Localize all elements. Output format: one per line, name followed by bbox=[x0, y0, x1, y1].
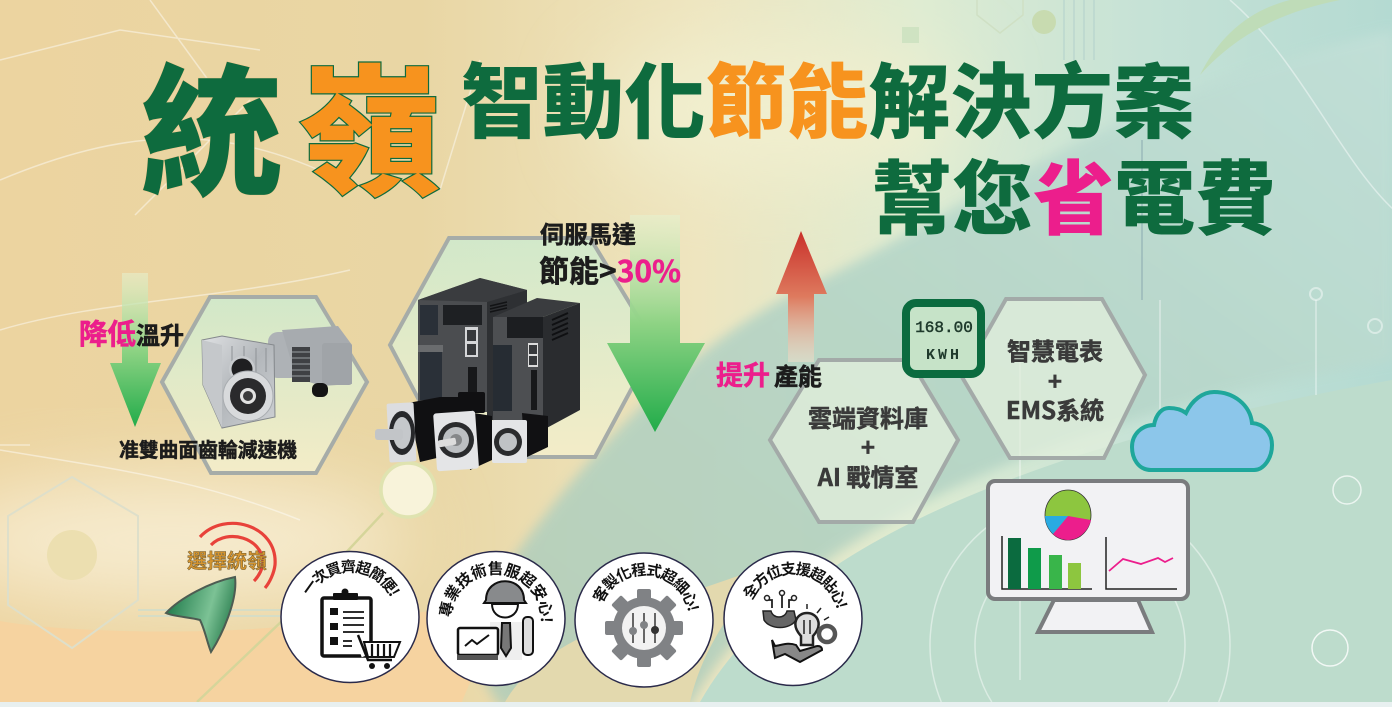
label: choose Tongling: 選擇統嶺 bbox=[187, 545, 267, 574]
label: lower temperature: 降低溫升 bbox=[79, 312, 184, 353]
badge: one-stop purchase: 一次買齊超簡便! bbox=[304, 559, 400, 596]
title: line 2: 幫您省電費 bbox=[871, 135, 1276, 252]
text: cloud database: + bbox=[861, 428, 875, 463]
line chart bbox=[1106, 537, 1177, 589]
icon: cloud bbox=[1132, 392, 1272, 470]
text: smart meter: 智慧電表 bbox=[1007, 332, 1103, 367]
badge: customised program: 客製化程式超細心! bbox=[592, 562, 700, 611]
hexagon: gear reducer bbox=[162, 297, 367, 473]
hexagon: cloud database bbox=[770, 360, 958, 522]
icon: computer monitor with charts bbox=[988, 481, 1188, 632]
text: cloud database: AI 戰情室 bbox=[817, 458, 918, 493]
label: energy saving 30%: 節能>30% bbox=[539, 247, 681, 291]
title: company name: 嶺 bbox=[299, 19, 441, 225]
badge: one-stop purchase bbox=[280, 550, 420, 684]
icon: hand, bulb and gears bbox=[763, 590, 835, 662]
title: line 1: 智動化節能解決方案 bbox=[461, 37, 1195, 155]
badge: professional service bbox=[426, 550, 566, 686]
bar chart bbox=[1002, 536, 1092, 589]
icon: checklist and cart bbox=[322, 588, 400, 669]
hexagon: smart meter bbox=[962, 299, 1145, 458]
title: company name bbox=[141, 19, 441, 225]
icon: kWh meter bbox=[906, 303, 981, 374]
badge: customised program bbox=[574, 552, 714, 688]
badge: professional service: 專業技術售服超安心! bbox=[438, 560, 553, 622]
title: company name: 統 bbox=[141, 19, 283, 225]
arrow: lower temperature bbox=[110, 273, 161, 427]
icon: gear reducer bbox=[202, 326, 352, 428]
label: servo motor: 伺服馬達 bbox=[540, 215, 636, 250]
product: servo drives and motors bbox=[375, 278, 580, 471]
pie chart bbox=[1045, 490, 1091, 540]
badge: full support: 全方位支援超貼心! bbox=[743, 561, 848, 608]
badge: full support bbox=[723, 550, 863, 686]
hexagon: servo motor bbox=[390, 238, 655, 457]
icon: engineer bbox=[457, 581, 533, 660]
icon: kWh meter: KWH bbox=[926, 347, 962, 364]
label: gear reducer: 准雙曲面齒輪減速機 bbox=[119, 434, 297, 463]
label: raise output: 提升產能 bbox=[716, 354, 822, 393]
icon: navigation pointer with signal arcs bbox=[166, 523, 275, 652]
arrow: energy saving bbox=[607, 215, 705, 432]
icon: kWh meter: 168.00 bbox=[915, 319, 973, 337]
arrow: raise output bbox=[776, 231, 827, 362]
text: smart meter: EMS系統 bbox=[1006, 391, 1104, 426]
text: smart meter: + bbox=[1048, 362, 1062, 397]
icon: gear with sliders bbox=[605, 589, 683, 667]
text: cloud database: 雲端資料庫 bbox=[808, 399, 928, 434]
